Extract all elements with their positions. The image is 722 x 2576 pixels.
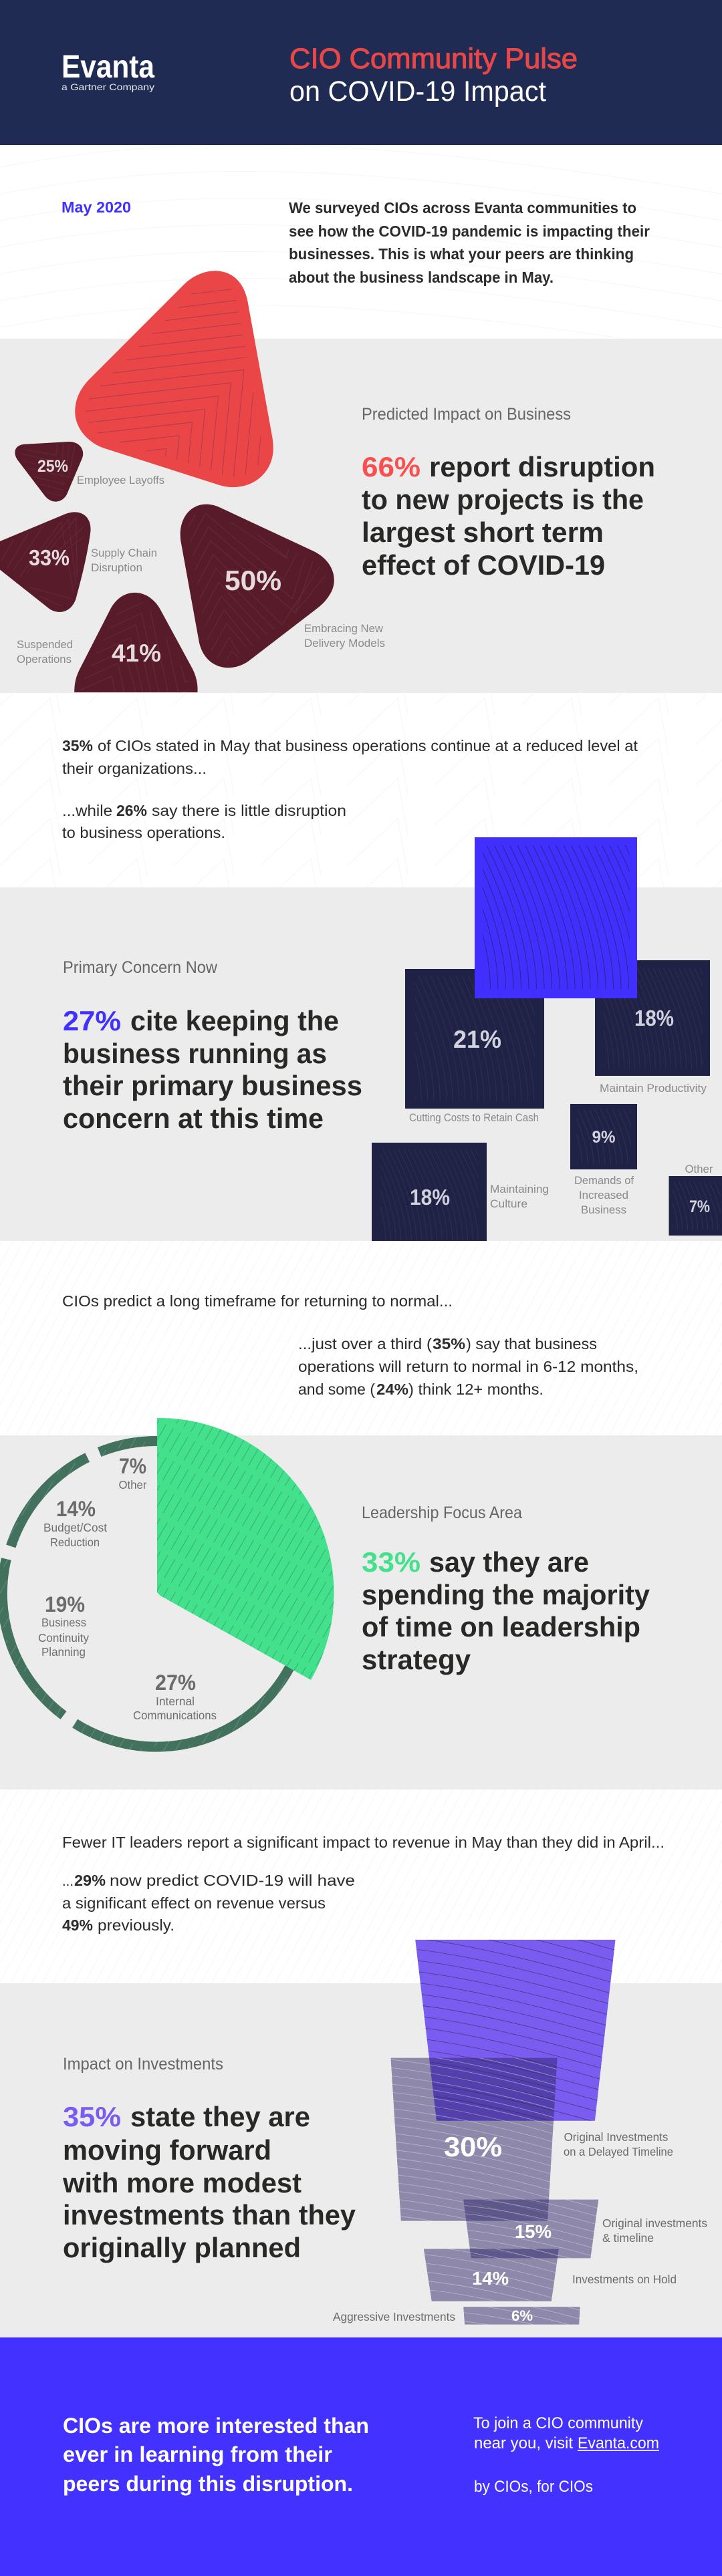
triangle: 25% employee layoffs: 25% <box>37 457 68 476</box>
square: 27% keeping business running (blue) <box>441 837 667 998</box>
funnel: 6% aggressive <box>463 2307 580 2325</box>
text block: timeframe: CIOs predict a long timeframe for returning to normal... <box>62 1292 453 1310</box>
label: supply chain disruption: Supply Chain <box>91 547 157 559</box>
text block: operations: their organizations... <box>62 760 207 777</box>
heading: 66% report disruption: 66% <box>362 451 420 482</box>
square: 9% increased business <box>561 1104 645 1169</box>
triangle: 41% suspended operations: 41% <box>112 639 161 667</box>
label: original timeline <box>602 2216 707 2245</box>
heading: 66% report disruption: largest short term <box>362 517 604 548</box>
text block: timeframe: operations will return to normal in 6-12 months, <box>298 1358 638 1375</box>
footer call to action: Evanta.com <box>578 2434 659 2452</box>
title: on COVID-19 Impact <box>289 76 546 108</box>
square: 7% other <box>658 1176 722 1236</box>
label: aggressive investments: Aggressive Investments <box>333 2310 455 2323</box>
square: 18% maintain productivity: 18% <box>634 1006 674 1030</box>
heading: 33% leadership strategy: strategy <box>362 1644 471 1675</box>
footer call to action: by CIOs, for CIOs <box>474 2478 593 2496</box>
pie label: 19% business continuity planning: Business <box>41 1616 86 1629</box>
triangle: 50% embracing new delivery models: 50% <box>225 565 281 596</box>
chart: primary concern squares <box>352 837 722 1241</box>
section label: leadership focus: Leadership Focus Area <box>362 1504 522 1522</box>
heading: 27% keeping the business running: concern at this time <box>63 1103 324 1134</box>
text block: revenue: a significant effect on revenue versus <box>62 1894 326 1912</box>
pie label: 19% business continuity planning <box>38 1592 89 1659</box>
label: embracing new delivery models <box>304 622 385 650</box>
text block: operations: 26% <box>116 802 147 819</box>
text block: timeframe: 35% <box>433 1335 465 1352</box>
intro paragraph: We surveyed CIOs across Evanta communities to <box>289 199 636 217</box>
text block: timeframe: ...just over a third ( <box>298 1335 432 1352</box>
pie label: 27% internal communications <box>133 1671 217 1722</box>
footer statement: peers during this disruption. <box>63 2472 353 2496</box>
heading: 27% keeping the business running: their primary business <box>63 1070 362 1101</box>
pie label: 14% budget/cost reduction: 14% <box>56 1497 96 1521</box>
heading: 66% report disruption: report disruption <box>429 451 655 482</box>
label: embracing new delivery models: Embracing New <box>304 622 384 635</box>
label: embracing new delivery models: Delivery Models <box>304 637 385 650</box>
pie label: 7% other: Other <box>119 1478 147 1491</box>
label: demands of increased business: Business <box>581 1203 626 1216</box>
heading: 33% leadership strategy: 33% <box>362 1546 420 1578</box>
text block: operations: say there is little disruption <box>152 802 346 819</box>
label: delayed timeline: on a Delayed Timeline <box>564 2145 673 2158</box>
pie label: 7% other <box>119 1454 147 1491</box>
label: supply chain disruption <box>91 547 157 574</box>
square: 18% maintaining culture <box>352 1143 503 1241</box>
label: maintaining culture <box>490 1183 549 1210</box>
text block: timeframe <box>62 1292 638 1398</box>
square: 18% maintaining culture: 18% <box>410 1185 450 1209</box>
label: demands of increased business: Increased <box>579 1189 628 1201</box>
label: original timeline: Original investments <box>602 2216 707 2230</box>
funnel: 15% original timeline <box>463 2200 599 2259</box>
heading: 66% report disruption <box>362 451 655 581</box>
label: delayed timeline <box>564 2130 673 2158</box>
pie label: 14% budget/cost reduction: Budget/Cost <box>43 1521 107 1534</box>
label: maintaining culture: Maintaining <box>490 1183 549 1195</box>
intro paragraph: businesses. This is what your peers are thinking <box>289 245 634 263</box>
footer call to action: To join a CIO community <box>473 2414 643 2432</box>
triangle: 33% supply chain disruption <box>0 512 91 612</box>
text block: timeframe: ) think 12+ months. <box>408 1381 544 1398</box>
intro paragraph: see how the COVID-19 pandemic is impacting their <box>289 223 650 240</box>
heading: 33% leadership strategy: of time on leadership <box>362 1611 640 1642</box>
heading: 33% leadership strategy <box>362 1546 650 1675</box>
pie label: 14% budget/cost reduction: Reduction <box>50 1536 100 1549</box>
text block: revenue: 29% <box>74 1872 106 1889</box>
heading: 66% report disruption: effect of COVID-19 <box>362 549 605 581</box>
chart: investment funnels <box>333 1939 707 2325</box>
wedge: 33% leadership strategy <box>157 1418 334 1680</box>
heading: 66% report disruption: to new projects is the <box>362 484 644 515</box>
footer statement: CIOs are more interested than <box>63 2414 369 2438</box>
text block: revenue <box>62 1834 665 1934</box>
label: maintaining culture: Culture <box>490 1197 527 1210</box>
heading: 33% leadership strategy: spending the majority <box>362 1579 650 1610</box>
heading: 35% modest investments: state they are <box>130 2101 310 2132</box>
label: cutting costs: Cutting Costs to Retain Cash <box>409 1111 539 1124</box>
triangle: 33% supply chain disruption: 33% <box>29 545 70 570</box>
label: delayed timeline: Original Investments <box>564 2130 669 2144</box>
pie label: 27% internal communications: 27% <box>155 1671 196 1695</box>
heading: 35% modest investments: with more modest <box>62 2167 302 2198</box>
triangle: 66% red <box>75 271 273 487</box>
intro paragraph: about the business landscape in May. <box>289 269 554 286</box>
funnel value: 15%: 15% <box>515 2221 552 2242</box>
label: suspended operations: Operations <box>17 653 72 666</box>
funnel value: 6%: 6% <box>511 2307 533 2324</box>
text block: timeframe: ) say that business <box>466 1335 597 1352</box>
text block: timeframe: and some ( <box>298 1381 375 1398</box>
text block: revenue: 49% <box>62 1916 93 1934</box>
pie label: 19% business continuity planning: Planning <box>41 1645 86 1659</box>
footer call to action: near you, visit <box>474 2434 573 2452</box>
heading: 27% keeping the business running <box>63 1005 362 1134</box>
Evanta logo: Evanta <box>62 49 154 85</box>
heading: 35% modest investments: 35% <box>63 2101 121 2132</box>
text block: operations: 35% <box>62 737 93 754</box>
triangle: 41% suspended operations <box>74 593 198 692</box>
label: on hold: Investments on Hold <box>572 2273 677 2286</box>
heading: 27% keeping the business running: business running as <box>63 1038 327 1069</box>
heading: 35% modest investments: investments than they <box>63 2199 356 2231</box>
section label: predicted impact: Predicted Impact on Business <box>362 405 571 424</box>
pie label: 19% business continuity planning: Continuity <box>38 1631 89 1644</box>
heading: 27% keeping the business running: cite keeping the <box>130 1005 339 1036</box>
label: employee layoffs: Employee Layoffs <box>77 474 164 486</box>
title: CIO Community Pulse <box>289 43 578 75</box>
pie label: 27% internal communications: Communications <box>133 1709 217 1722</box>
pie label: 7% other: 7% <box>119 1454 146 1478</box>
square: 21% cutting costs <box>381 969 566 1109</box>
heading: 27% keeping the business running: 27% <box>63 1005 121 1036</box>
label: maintain productivity: Maintain Productivity <box>600 1082 707 1095</box>
label: suspended operations: Suspended <box>17 638 73 651</box>
label: demands of increased business: Demands of <box>574 1174 634 1187</box>
section label: primary concern: Primary Concern Now <box>63 958 218 977</box>
footer statement: ever in learning from their <box>63 2442 332 2466</box>
funnel value: 14%: 14% <box>472 2268 509 2289</box>
text block: revenue: Fewer IT leaders report a significant impact to revenue in May than they did in April... <box>62 1834 665 1851</box>
funnel value: 30%: 30% <box>444 2131 502 2162</box>
footer call to action <box>473 2414 659 2496</box>
square: 18% maintain productivity <box>576 960 722 1076</box>
title <box>289 43 578 108</box>
heading: 35% modest investments <box>62 2101 356 2263</box>
heading: 35% modest investments: originally planned <box>63 2232 301 2263</box>
square: 9% increased business: 9% <box>592 1128 615 1147</box>
header banner <box>0 0 722 145</box>
square: 7% other: 7% <box>689 1197 710 1216</box>
date label: May 2020 <box>62 198 131 216</box>
triangle: 50% embracing new delivery models <box>180 505 334 668</box>
section label: impact on investments: Impact on Investments <box>63 2055 223 2073</box>
text block: operations: to business operations. <box>62 824 225 841</box>
text block: operations: ...while <box>62 802 112 819</box>
label: supply chain disruption: Disruption <box>91 561 142 574</box>
triangle: 25% employee layoffs <box>15 442 83 502</box>
funnel: 35% modest investments <box>415 1939 615 2121</box>
pie label: 14% budget/cost reduction <box>43 1497 107 1549</box>
pie label: 19% business continuity planning: 19% <box>45 1592 85 1616</box>
ring segments <box>2 1441 290 1747</box>
chart: predicted impact triangles <box>0 271 385 692</box>
intro paragraph <box>289 199 650 286</box>
text block: timeframe: 24% <box>376 1381 408 1398</box>
footer banner <box>0 2337 722 2576</box>
label: suspended operations <box>17 638 73 666</box>
heading: 35% modest investments: moving forward <box>63 2134 271 2166</box>
label: demands of increased business <box>574 1174 634 1216</box>
text block: operations: of CIOs stated in May that business operations continue at a reduced level at <box>98 737 638 754</box>
pie label: 27% internal communications: Internal <box>156 1695 195 1708</box>
Evanta logo: a Gartner Company <box>62 82 154 92</box>
heading: 33% leadership strategy: say they are <box>429 1546 589 1578</box>
funnel: 30% delayed timeline <box>390 2058 558 2221</box>
footer statement <box>63 2414 369 2496</box>
text block: revenue: ... <box>62 1872 74 1889</box>
text block: revenue: previously. <box>98 1916 174 1934</box>
text block: operations <box>62 737 638 841</box>
chart: leadership focus ring and wedge <box>2 1418 334 1747</box>
square: 21% cutting costs: 21% <box>453 1026 501 1053</box>
text block: revenue: now predict COVID-19 will have <box>110 1872 355 1889</box>
label: original timeline: & timeline <box>602 2231 654 2245</box>
label: other: Other <box>685 1163 713 1175</box>
funnel: 14% on hold <box>424 2249 559 2301</box>
